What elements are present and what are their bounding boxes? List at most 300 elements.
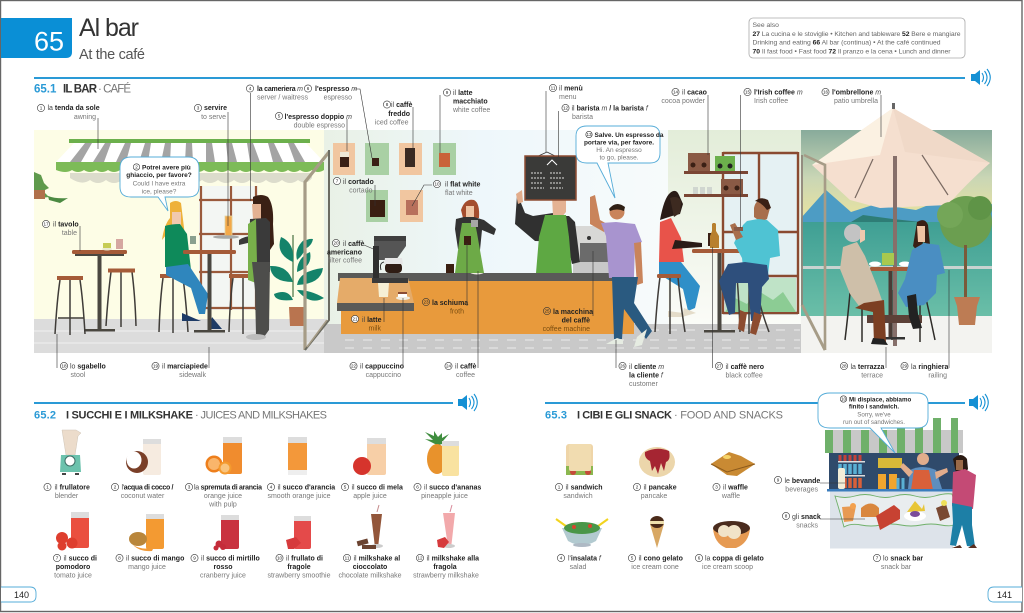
speech bubble: espresso: Hi. An espresso xyxy=(596,147,642,154)
table 2 xyxy=(183,250,236,332)
hanging plant xyxy=(34,172,68,203)
label 16: patio umbrella: 16 xyxy=(823,90,828,95)
label 21: milk: 21 xyxy=(352,317,358,322)
label 15: Irish coffee: 15 xyxy=(745,90,750,95)
label 18: stool: stool xyxy=(70,372,86,379)
title xyxy=(79,14,145,63)
label 7: cortado xyxy=(333,177,375,206)
label: beverages: 9 xyxy=(777,478,780,483)
label 11: menu: il menù xyxy=(559,86,583,92)
menu board xyxy=(525,152,576,200)
caption: strawberry milkshake: fragola xyxy=(433,564,457,571)
label 29: railing: 29 xyxy=(902,364,907,369)
label 20: filter coffee: 20 xyxy=(333,241,339,246)
item: strawberry smoothie xyxy=(286,516,311,549)
label 25: coffee machine xyxy=(543,251,593,333)
title: At the café xyxy=(79,47,145,63)
label 23: froth: froth xyxy=(450,308,464,316)
label 25: coffee machine: coffee machine xyxy=(543,326,590,333)
caption: ice cream cone: il cono gelato xyxy=(638,556,683,562)
label: snacks: gli snack xyxy=(792,514,821,521)
caption: ice cream scoop: ice cream scoop xyxy=(702,564,753,571)
label 3: to serve: 3 xyxy=(197,106,200,111)
label 27: black coffee xyxy=(712,247,764,380)
heading 65.3 xyxy=(545,410,783,422)
barista man xyxy=(515,190,580,273)
label 27: black coffee: black coffee xyxy=(726,372,763,380)
caption: waffle: 3 xyxy=(715,485,718,490)
caption: pancake: pancake xyxy=(641,493,667,500)
speech bubble: snack bar xyxy=(818,393,928,453)
label 26: customer: la cliente f xyxy=(629,372,664,380)
caption: strawberry smoothie: strawberry smoothie xyxy=(267,572,331,580)
window xyxy=(199,186,258,310)
caption: apple juice: apple juice xyxy=(353,493,387,500)
item: strawberry milkshake xyxy=(437,505,455,548)
caption: waffle: waffle xyxy=(721,493,740,500)
label 15: Irish coffee: l'Irish coffee m xyxy=(754,90,803,96)
label 1: awning: awning xyxy=(74,114,96,121)
label 17: table xyxy=(42,220,80,251)
customer man xyxy=(590,195,652,347)
label 21: milk xyxy=(351,298,384,332)
label 26: customer: il cliente m xyxy=(629,364,664,371)
label: snacks: snacks xyxy=(796,522,818,530)
caption: orange juice with pulp: orange juice xyxy=(204,493,242,500)
barista woman xyxy=(455,200,496,273)
caption: coconut water: 2 xyxy=(114,485,117,490)
cup on bar xyxy=(446,264,484,274)
label: beverages: le bevande xyxy=(784,478,820,485)
label 22: cappuccino: cappuccino xyxy=(366,372,401,379)
terrace umbrella xyxy=(812,103,990,346)
label 14: cocoa powder: il cacao xyxy=(682,90,707,96)
caption: smooth orange juice xyxy=(267,483,335,500)
speech bubble: awning xyxy=(120,157,199,211)
see also box xyxy=(749,18,965,58)
icon: speaker 65.1 xyxy=(971,69,990,86)
rear window and shelves xyxy=(684,152,798,315)
label 5: double espresso: double espresso xyxy=(294,122,345,130)
label 11: menu: 11 xyxy=(551,86,556,91)
label 25: coffee machine: la macchina xyxy=(553,309,593,316)
caption: strawberry smoothie: il frullato di xyxy=(286,556,323,562)
speech bubble: espresso: Salve. Un espresso da xyxy=(594,132,664,139)
label 16: patio umbrella: patio umbrella xyxy=(834,98,878,105)
caption: cranberry juice: rosso xyxy=(213,564,233,571)
caption: blender: 1 xyxy=(46,485,49,490)
seated woman with blonde hair xyxy=(162,201,222,329)
item: apple juice xyxy=(353,438,386,475)
page number 141: 141 xyxy=(997,590,1012,600)
label 10: flat white: flat white xyxy=(445,190,473,197)
woman in blue dress xyxy=(898,220,945,329)
coffee machine xyxy=(573,226,610,273)
label 11: menu xyxy=(546,84,583,152)
label 3: to serve xyxy=(194,104,228,226)
terrace background xyxy=(801,130,992,353)
caption: cranberry juice: cranberry juice xyxy=(200,572,246,580)
caption: strawberry milkshake: strawberry milkshake xyxy=(413,572,479,580)
caption: chocolate milkshake: 11 xyxy=(345,556,350,561)
customer woman xyxy=(950,455,977,548)
item: chocolate milkshake xyxy=(357,505,383,549)
label 4: waitress: 4 xyxy=(249,86,252,91)
waitress xyxy=(213,195,274,340)
caption: strawberry milkshake: 12 xyxy=(417,556,423,561)
caption: salad: salad xyxy=(570,564,586,571)
label 12: barista: 12 xyxy=(563,106,568,111)
label 24: coffee: coffee xyxy=(456,372,475,379)
item: sandwich xyxy=(566,444,593,475)
wall frames with coffee xyxy=(333,143,456,222)
label 25: coffee machine: del caffè xyxy=(562,318,590,324)
interior floor xyxy=(324,324,801,353)
section rule 65.1 xyxy=(34,77,965,79)
caption: mango juice: il succo di mango xyxy=(126,556,184,562)
heading 65.1 xyxy=(34,82,131,96)
label 17: table: table xyxy=(62,230,77,237)
caption: strawberry smoothie xyxy=(267,554,331,580)
section rule 65.3 xyxy=(545,402,965,404)
item: cranberry juice xyxy=(214,515,239,550)
snack bar illustration xyxy=(825,418,977,548)
label: snack bar: snack bar xyxy=(881,564,912,571)
label 12: barista xyxy=(558,104,649,157)
caption: smooth orange juice: smooth orange juice xyxy=(267,493,331,500)
label 14: cocoa powder xyxy=(661,88,708,155)
caption: mango juice: 8 xyxy=(118,556,121,561)
table 1 xyxy=(72,239,127,332)
caption: pancake: il pancake xyxy=(644,484,677,492)
potted plant xyxy=(270,235,324,326)
label 14: cocoa powder: cocoa powder xyxy=(661,98,706,105)
speech bubble: awning: 2 xyxy=(135,165,138,170)
label 27: black coffee: 27 xyxy=(716,364,722,369)
speech bubble: awning: Potrei avere più xyxy=(142,164,191,172)
item: mango juice xyxy=(129,514,164,551)
label 6: espresso: espresso xyxy=(324,94,352,102)
label 20: filter coffee: il caffè xyxy=(343,241,365,248)
icon: speaker 65.2 xyxy=(458,394,477,411)
woman in red xyxy=(659,191,702,317)
label 28: terrace: 28 xyxy=(841,364,847,369)
shelves with bottles xyxy=(838,455,903,489)
label 14: cocoa powder: 14 xyxy=(673,90,678,95)
sidewalk xyxy=(34,319,326,353)
table 3 with drinks xyxy=(655,223,769,334)
caption: ice cream scoop: la coppa di gelato xyxy=(705,556,764,562)
label 29: railing xyxy=(901,270,949,380)
caption: strawberry milkshake xyxy=(413,554,479,580)
label 7: cortado: cortado xyxy=(349,188,373,194)
see also box: 27 La cucina e le stoviglie • Kitchen and tableware 52 Bere e mangiare xyxy=(752,31,961,38)
heading 65.1: IL BAR xyxy=(63,84,98,96)
label 6: espresso xyxy=(304,85,372,158)
label 17: table: il tavolo xyxy=(53,222,79,228)
caption: cranberry juice xyxy=(191,554,260,580)
caption: tomato juice xyxy=(53,554,97,580)
speech bubble: awning: ghiaccio, per favore? xyxy=(126,172,192,179)
caption: ice cream scoop: 6 xyxy=(698,556,701,561)
heading 65.1: · CAFÉ xyxy=(98,82,131,96)
label 3: to serve: servire xyxy=(204,105,227,112)
caption: blender xyxy=(44,483,90,500)
page number 141 xyxy=(988,587,1022,602)
label 8: iced coffee: 8 xyxy=(386,102,389,107)
speech bubble: awning: Could I have extra xyxy=(133,180,186,188)
caption: chocolate milkshake xyxy=(338,554,402,580)
label: snack bar xyxy=(873,554,923,571)
label 1: awning: 1 xyxy=(40,106,43,111)
label 24: coffee: 24 xyxy=(446,364,451,369)
label 9: white coffee: macchiato xyxy=(453,98,488,106)
label: snacks xyxy=(782,512,865,530)
label 29: railing: railing xyxy=(928,372,947,380)
label 11: menu: menu xyxy=(559,94,577,101)
label 6: espresso: l'espresso m xyxy=(315,86,357,93)
label 4: waitress: server / waitress xyxy=(257,94,308,102)
label 19: sidewalk: sidewalk xyxy=(179,372,206,379)
label: beverages xyxy=(774,476,845,494)
vendor xyxy=(900,453,948,490)
old woman xyxy=(840,224,888,345)
caption: ice cream cone: ice cream cone xyxy=(631,564,679,571)
speech bubble: snack bar: Sorry, we've xyxy=(857,412,891,418)
caption: pineapple juice xyxy=(414,483,481,500)
item: orange juice with pulp xyxy=(206,437,242,474)
label 7: cortado: 7 xyxy=(336,179,339,184)
caption: tomato juice: il succo di xyxy=(64,556,97,562)
stools left xyxy=(55,268,249,335)
label 8: iced coffee: il caffè xyxy=(391,102,413,109)
caption: ice cream scoop xyxy=(695,554,764,571)
chapter number tab xyxy=(1,18,72,58)
label 10: flat white xyxy=(412,180,481,206)
speech bubble: espresso: to go, please. xyxy=(599,154,639,162)
label 19: sidewalk xyxy=(152,347,209,379)
caption: strawberry smoothie: fragole xyxy=(287,564,311,571)
caption: orange juice with pulp: la spremuta di arancia xyxy=(194,484,262,492)
caption: coconut water xyxy=(111,483,174,500)
label 18: stool xyxy=(57,334,106,379)
label 19: sidewalk: il marciapiede xyxy=(162,364,208,370)
label 9: white coffee: 9 xyxy=(446,90,449,95)
snacks display xyxy=(842,500,950,530)
terrace door xyxy=(802,155,825,350)
kiosk back xyxy=(829,453,959,490)
rear wall xyxy=(668,130,801,327)
label 6: espresso: 6 xyxy=(307,86,310,91)
label 16: patio umbrella: l'ombrellone m xyxy=(832,90,881,96)
title: Al bar xyxy=(79,14,139,42)
caption: strawberry milkshake: il milkshake alla xyxy=(426,556,479,562)
item: ice cream cone xyxy=(650,516,664,548)
label 12: barista: il barista m / la barista f xyxy=(572,106,649,112)
speech bubble: espresso xyxy=(576,126,664,198)
page number 140 xyxy=(1,587,36,602)
caption: sandwich: sandwich xyxy=(563,493,593,500)
label: beverages: beverages xyxy=(785,486,818,494)
caption: cranberry juice: il succo di mirtillo xyxy=(201,556,260,562)
label 26: customer: customer xyxy=(629,381,658,388)
item: coconut water xyxy=(126,439,161,475)
label 18: stool: 18 xyxy=(61,364,67,369)
caption: orange juice with pulp: with pulp xyxy=(208,502,237,508)
caption: coconut water: l'acqua di cocco / xyxy=(122,484,174,492)
caption: waffle: il waffle xyxy=(723,484,748,492)
label 26: customer xyxy=(616,340,664,388)
caption: pineapple juice: pineapple juice xyxy=(421,493,468,500)
speech bubble: snack bar: Mi dispiace, abbiamo xyxy=(849,396,911,404)
see also box: See also xyxy=(752,22,779,29)
heading 65.3: I CIBI E GLI SNACK xyxy=(577,410,672,422)
heading 65.2: 65.2 xyxy=(34,410,56,422)
caption: salad: 4 xyxy=(560,556,563,561)
speech bubble: snack bar: run out of sandwiches. xyxy=(843,419,905,426)
item: ice cream scoop xyxy=(713,521,750,548)
label 29: railing: la ringhiera xyxy=(911,364,948,371)
speech bubble: snack bar: 10 xyxy=(841,397,846,402)
scene illustration: café xyxy=(34,103,992,353)
heading 65.2 xyxy=(34,410,327,422)
label 12: barista: barista xyxy=(572,114,593,121)
label 20: filter coffee: filter coffee xyxy=(328,258,362,264)
caption: blender: il frullatore xyxy=(54,484,90,492)
label 21: milk: milk xyxy=(369,326,381,332)
label 23: froth xyxy=(422,243,468,316)
terrace table and stools xyxy=(845,253,935,342)
label 20: filter coffee: americano xyxy=(327,250,362,256)
label 19: sidewalk: 19 xyxy=(153,364,158,369)
section rule 65.2 xyxy=(34,402,453,404)
tree in pot xyxy=(937,196,992,325)
label 8: iced coffee xyxy=(375,101,413,148)
label 15: Irish coffee xyxy=(740,88,803,228)
label 15: Irish coffee: Irish coffee xyxy=(754,98,788,105)
label 18: stool: lo sgabello xyxy=(70,364,106,370)
speech bubble: awning: ice, please? xyxy=(142,188,177,196)
label 25: coffee machine: 25 xyxy=(544,309,550,314)
label 5: double espresso xyxy=(275,112,352,151)
caption: ice cream cone: 5 xyxy=(631,556,634,561)
item: salad xyxy=(556,519,608,547)
heading 65.2: · JUICES AND MILKSHAKES xyxy=(195,410,327,422)
label 9: white coffee xyxy=(440,89,490,153)
label 3: to serve: to serve xyxy=(201,114,226,121)
caption: apple juice: 5 xyxy=(344,485,347,490)
left wall xyxy=(34,130,326,322)
caption: sandwich: il sandwich xyxy=(566,484,602,492)
speech bubble: espresso: portare via, per favore. xyxy=(584,140,654,146)
heading 65.3: · FOOD AND SNACKS xyxy=(674,410,783,422)
label 17: table: 17 xyxy=(43,222,49,227)
item: pancake xyxy=(639,447,675,477)
caption: tomato juice: 7 xyxy=(56,556,59,561)
caption: tomato juice: pomodoro xyxy=(56,564,90,571)
awning xyxy=(56,139,324,183)
label 10: flat white: 10 xyxy=(434,182,440,187)
label 10: flat white: il flat white xyxy=(445,182,481,188)
label 22: cappuccino: il cappuccino xyxy=(360,364,404,370)
caption: sandwich xyxy=(555,483,602,500)
caption: pineapple juice: 6 xyxy=(416,485,419,490)
caption: waffle xyxy=(713,483,748,500)
label 8: iced coffee: iced coffee xyxy=(375,120,409,126)
caption: pancake xyxy=(633,483,677,500)
label: snacks: 8 xyxy=(785,514,788,519)
door left xyxy=(305,150,329,350)
speech bubble: espresso: 13 xyxy=(586,132,592,137)
filter coffee machine xyxy=(372,236,408,283)
heading 65.2: I SUCCHI E I MILKSHAKE xyxy=(66,410,193,422)
caption: salad xyxy=(557,554,602,571)
caption: chocolate milkshake: cioccolato xyxy=(353,564,387,571)
label 5: double espresso: 5 xyxy=(278,114,281,119)
heading 65.3: 65.3 xyxy=(545,410,567,422)
label 21: milk: il latte xyxy=(362,317,382,324)
caption: apple juice: il succo di mela xyxy=(352,484,403,492)
see also box: Drinking and eating 66 Al bar (continua) • At the café continued xyxy=(752,40,941,46)
milk and cappuccino on counter xyxy=(378,283,410,300)
caption: cranberry juice: 9 xyxy=(193,556,196,561)
caption: smooth orange juice: il succo d'arancia xyxy=(278,484,335,492)
label 1: awning: la tenda da sole xyxy=(48,105,100,112)
interior wall xyxy=(324,130,669,327)
caption: mango juice xyxy=(116,554,184,571)
speech bubble: snack bar: finito i sandwich. xyxy=(849,404,899,410)
caption: mango juice: mango juice xyxy=(128,564,166,571)
label 24: coffee xyxy=(445,271,478,379)
label 28: terrace xyxy=(840,347,886,380)
label: snack bar: lo snack bar xyxy=(883,556,923,562)
awning xyxy=(825,418,963,453)
caption: orange juice with pulp: 3 xyxy=(188,485,191,490)
label 4: waitress: la cameriera m xyxy=(257,86,303,93)
caption: apple juice xyxy=(341,483,403,500)
page number 140: 140 xyxy=(14,590,29,600)
label 5: double espresso: l'espresso doppio m xyxy=(284,114,352,121)
item: tomato juice xyxy=(56,512,89,550)
label 8: iced coffee: freddo xyxy=(388,111,410,118)
caption: tomato juice: tomato juice xyxy=(54,572,92,580)
caption: coconut water: coconut water xyxy=(121,493,165,500)
counter xyxy=(827,489,961,548)
man in teal shirt xyxy=(719,198,780,335)
label 16: patio umbrella xyxy=(822,88,881,137)
label 23: froth: 23 xyxy=(423,300,429,305)
caption: sandwich: 1 xyxy=(558,485,561,490)
label 4: waitress xyxy=(246,85,308,201)
label 22: cappuccino: 22 xyxy=(351,364,356,369)
caption: chocolate milkshake: il milkshake al xyxy=(354,556,400,562)
label 28: terrace: terrace xyxy=(861,372,883,380)
caption: blender: blender xyxy=(55,493,79,500)
label 9: white coffee: il latte xyxy=(453,90,473,97)
label 7: cortado: il cortado xyxy=(343,179,374,186)
item: blender xyxy=(60,430,81,475)
label 26: customer: 26 xyxy=(620,364,625,369)
label: snack bar: 7 xyxy=(876,556,879,561)
label 9: white coffee: white coffee xyxy=(452,107,490,114)
label 20: filter coffee xyxy=(327,239,378,264)
counter xyxy=(337,273,634,334)
see also box: 70 Il fast food • Fast food 72 Il pranzo e la cena • Lunch and dinner xyxy=(752,48,951,56)
label 28: terrace: la terrazza xyxy=(850,364,884,371)
label 1: awning xyxy=(37,104,100,149)
caption: orange juice with pulp xyxy=(185,483,262,508)
label 27: black coffee: il caffè nero xyxy=(726,364,764,371)
